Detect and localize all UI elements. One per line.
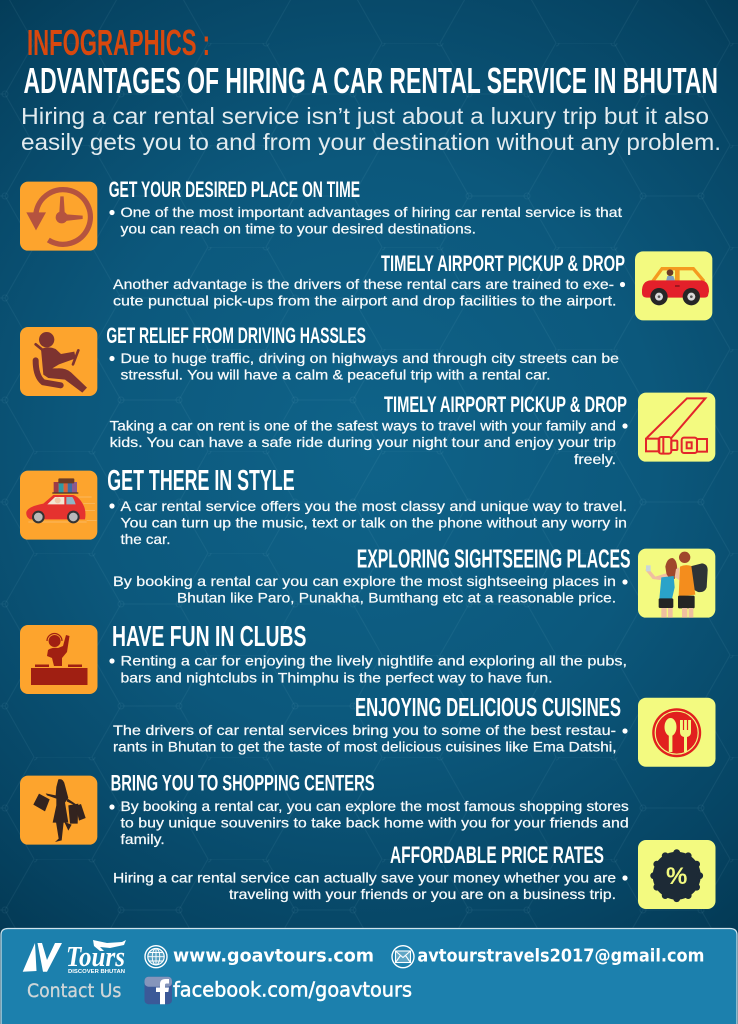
heading: infographics: INFOGRAPHICS : bbox=[27, 22, 210, 63]
body text bbox=[113, 277, 616, 308]
heading: AFFORDABLE PRICE RATES bbox=[390, 842, 604, 869]
body text: Bhutan like Paro, Punakha, Bumthang etc at a reasonable price. bbox=[177, 591, 616, 606]
bullet bbox=[620, 282, 625, 287]
body text: You can turn up the music, text or talk on the phone without any worry in bbox=[120, 516, 627, 530]
body text bbox=[120, 799, 629, 847]
logo: AV Tours: Tours bbox=[66, 942, 125, 973]
email: avtourstravels2017@gmail.com bbox=[417, 946, 704, 967]
icon: red car with driver bbox=[635, 251, 712, 320]
body text: to buy unique souvenirs to take back home with you for your friends and bbox=[120, 816, 629, 831]
icon: mail bbox=[392, 946, 414, 968]
intro text: easily gets you to and from your destination without any problem. bbox=[21, 129, 721, 155]
body text: kids. You can have a safe ride during your night tour and enjoy your trip bbox=[110, 435, 616, 450]
heading: GET RELIEF FROM DRIVING HASSLES bbox=[106, 323, 366, 348]
footer background bbox=[1, 928, 737, 1024]
icon: percent badge: % bbox=[666, 863, 687, 890]
panel: affordable price rates bbox=[113, 840, 716, 909]
intro text bbox=[21, 103, 721, 155]
intro text: Hiring a car rental service isn’t just about a luxury trip but it also bbox=[21, 103, 709, 129]
bullet bbox=[109, 658, 115, 664]
bullet bbox=[109, 210, 115, 215]
body text: Another advantage is the drivers of these rental cars are trained to exe- bbox=[113, 277, 614, 292]
bullet bbox=[622, 423, 628, 429]
body text bbox=[120, 351, 619, 382]
heading: HAVE FUN IN CLUBS bbox=[112, 621, 306, 653]
panel: bring you to shopping centers bbox=[20, 771, 629, 847]
bullet bbox=[109, 503, 115, 509]
icon: facebook bbox=[144, 977, 172, 1004]
body text: bars and nightclubs in Thimphu is the perfect way to have fun. bbox=[120, 670, 552, 685]
body text: A car rental service offers you the most classy and unique way to travel. bbox=[120, 499, 627, 514]
body text: traveling with your friends or you are on a business trip. bbox=[229, 887, 616, 902]
heading: BRING YOU TO SHOPPING CENTERS bbox=[111, 771, 375, 796]
icon: percent badge bbox=[638, 840, 716, 909]
icon: car with luggage bbox=[20, 471, 97, 540]
body text: One of the most important advantages of hiring car rental service is that bbox=[120, 205, 622, 220]
panel: safety seat belt bbox=[110, 392, 715, 467]
panel: get there in style bbox=[20, 465, 627, 547]
body text bbox=[113, 574, 616, 606]
logo: AV Tours: DISCOVER BHUTAN bbox=[68, 969, 125, 975]
website: www.goavtours.com bbox=[173, 946, 374, 967]
icon: clock bbox=[20, 182, 97, 251]
body text: Hiring a car rental service can actually save your money whether you are bbox=[113, 870, 616, 885]
body text: By booking a rental car you can explore the most sightseeing places in bbox=[113, 574, 616, 589]
body text: Renting a car for enjoying the lively nightlife and exploring all the pubs, bbox=[120, 654, 627, 669]
body text bbox=[110, 418, 616, 467]
heading: TIMELY AIRPORT PICKUP & DROP bbox=[384, 392, 627, 417]
body text bbox=[120, 499, 627, 547]
body text: Taking a car on rent is one of the safest ways to travel with your family and bbox=[110, 418, 616, 434]
icon: woman with shopping bags bbox=[20, 776, 97, 845]
body text bbox=[113, 723, 616, 755]
body text: cute punctual pick-ups from the airport and drop facilities to the airport. bbox=[113, 294, 616, 308]
body text: you can reach on time to your desired destinations. bbox=[120, 222, 476, 236]
body text: the car. bbox=[120, 532, 170, 547]
icon: two tourists bbox=[638, 549, 715, 618]
icon: seated driver bbox=[20, 327, 97, 396]
facebook address: facebook.com/goavtours bbox=[173, 978, 412, 1002]
body text: Due to huge traffic, driving on highways and through city streets can be bbox=[120, 351, 619, 366]
panel: enjoying delicious cuisines bbox=[113, 692, 716, 767]
panel: get relief from driving hassles bbox=[20, 323, 619, 396]
body text bbox=[120, 654, 627, 685]
heading: TIMELY AIRPORT PICKUP & DROP bbox=[381, 251, 625, 276]
panel: have fun in clubs bbox=[20, 621, 627, 694]
icon: spoon and fork bbox=[638, 698, 716, 767]
panel: exploring sightseeing places bbox=[113, 543, 715, 618]
bullet bbox=[622, 728, 628, 734]
icon: globe bbox=[145, 946, 167, 968]
panel: get your desired place on time bbox=[20, 177, 622, 251]
bullet bbox=[109, 356, 115, 361]
body text bbox=[120, 205, 622, 236]
footer panel bbox=[1, 928, 737, 1024]
body text: By booking a rental car, you can explore the most famous shopping stores bbox=[120, 799, 629, 814]
heading: GET YOUR DESIRED PLACE ON TIME bbox=[109, 177, 360, 202]
panel: timely airport pickup and drop bbox=[113, 251, 712, 320]
icon: DJ bbox=[20, 625, 98, 694]
body text: freely. bbox=[574, 452, 616, 467]
icon: seat belt bbox=[638, 393, 715, 462]
bullet bbox=[622, 875, 628, 881]
heading: GET THERE IN STYLE bbox=[107, 465, 295, 497]
body text: stressful. You will have a calm & peaceful trip with a rental car. bbox=[120, 368, 550, 382]
body text bbox=[113, 870, 616, 902]
contact us label: Contact Us bbox=[27, 980, 121, 1002]
bullet bbox=[109, 804, 115, 810]
body text: The drivers of car rental services bring you to some of the best restau- bbox=[113, 723, 616, 738]
title block bbox=[24, 22, 718, 101]
body text: rants in Bhutan to get the taste of most delicious cuisines like Ema Datshi, bbox=[113, 740, 616, 755]
body text: family. bbox=[120, 832, 165, 847]
bullet bbox=[622, 579, 628, 585]
logo: AV Tours bbox=[23, 940, 126, 975]
